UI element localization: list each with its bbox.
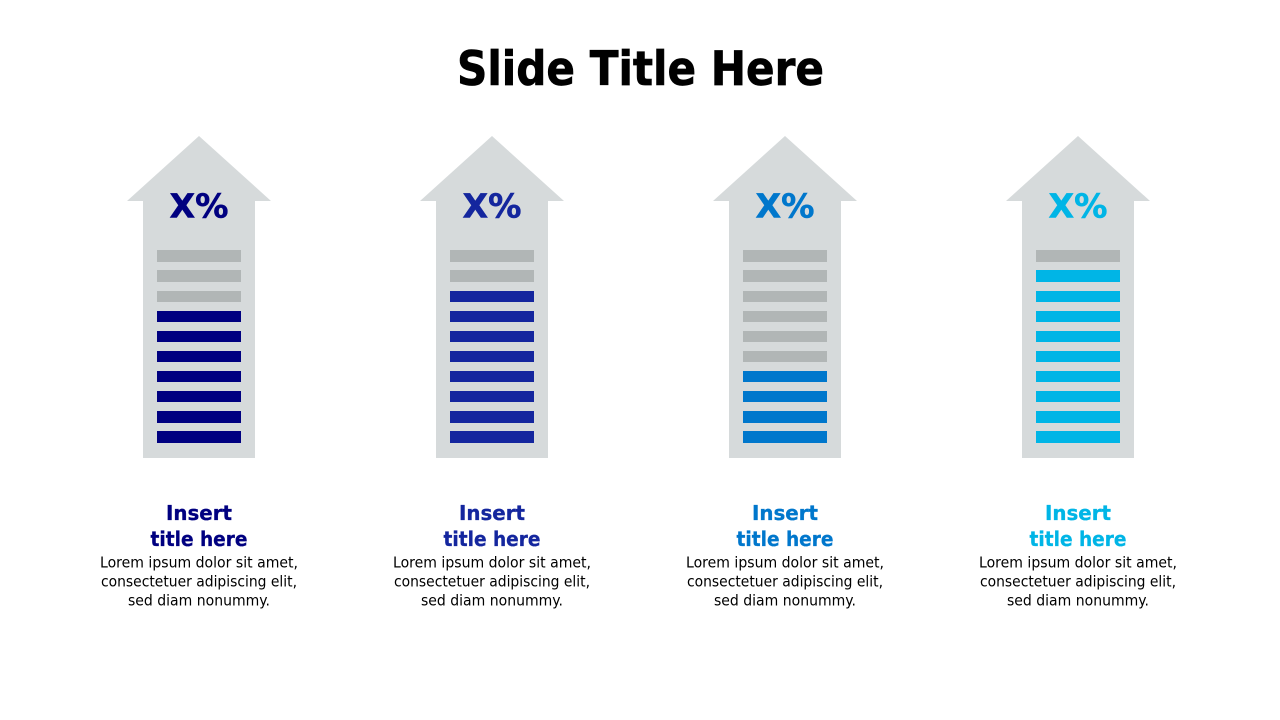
heading 3 [736,501,834,551]
bar gauge 4: 9 of 10 filled [1036,250,1120,443]
text block 4: sed diam nonummy. [1007,592,1149,610]
panel: column 3 [686,136,884,610]
text block 1 [100,554,298,610]
heading 2 [444,501,540,551]
heading 4 [1030,501,1126,551]
text block 3: Lorem ipsum dolor sit amet, [686,554,884,572]
heading 4: Insert [1045,501,1111,525]
icon: arrow 2 [420,136,564,458]
text block 4: consectetuer adipiscing elit, [980,572,1176,590]
text block 4: Lorem ipsum dolor sit amet, [979,554,1177,572]
panel: column 2 [393,136,591,610]
heading 1: Insert [166,501,232,525]
heading 2: title here [444,527,540,551]
text block 3 [686,554,884,610]
icon: arrow 4 [1006,136,1150,458]
bar gauge 2: 8 of 10 filled [450,250,534,443]
text block 2: Lorem ipsum dolor sit amet, [393,554,591,572]
text block 2: consectetuer adipiscing elit, [394,572,590,590]
panel: column 4 [979,136,1177,610]
percentage 4: X% [1048,188,1108,226]
icon: arrow 3 [713,136,857,458]
bar gauge 3: 4 of 10 filled [743,250,827,443]
text block 4 [979,554,1177,610]
text block 3: sed diam nonummy. [714,592,856,610]
heading 1: title here [150,527,248,551]
heading 3: Insert [752,501,818,525]
text block 2: sed diam nonummy. [421,592,563,610]
bar gauge 1: 7 of 10 filled [157,250,241,443]
percentage 1: X% [170,188,228,226]
text block 1: Lorem ipsum dolor sit amet, [100,554,298,572]
title: Slide Title Here [457,42,824,97]
panel: column 1 [100,136,298,610]
heading 2: Insert [459,501,525,525]
text block 3: consectetuer adipiscing elit, [687,572,883,590]
heading 1 [150,501,248,551]
icon: arrow 1 [127,136,271,458]
text block 2 [393,554,591,610]
text block 1: sed diam nonummy. [128,592,270,610]
percentage 2: X% [462,188,522,226]
heading 4: title here [1030,527,1126,551]
percentage 3: X% [756,188,814,226]
heading 3: title here [736,527,834,551]
text block 1: consectetuer adipiscing elit, [101,572,297,590]
